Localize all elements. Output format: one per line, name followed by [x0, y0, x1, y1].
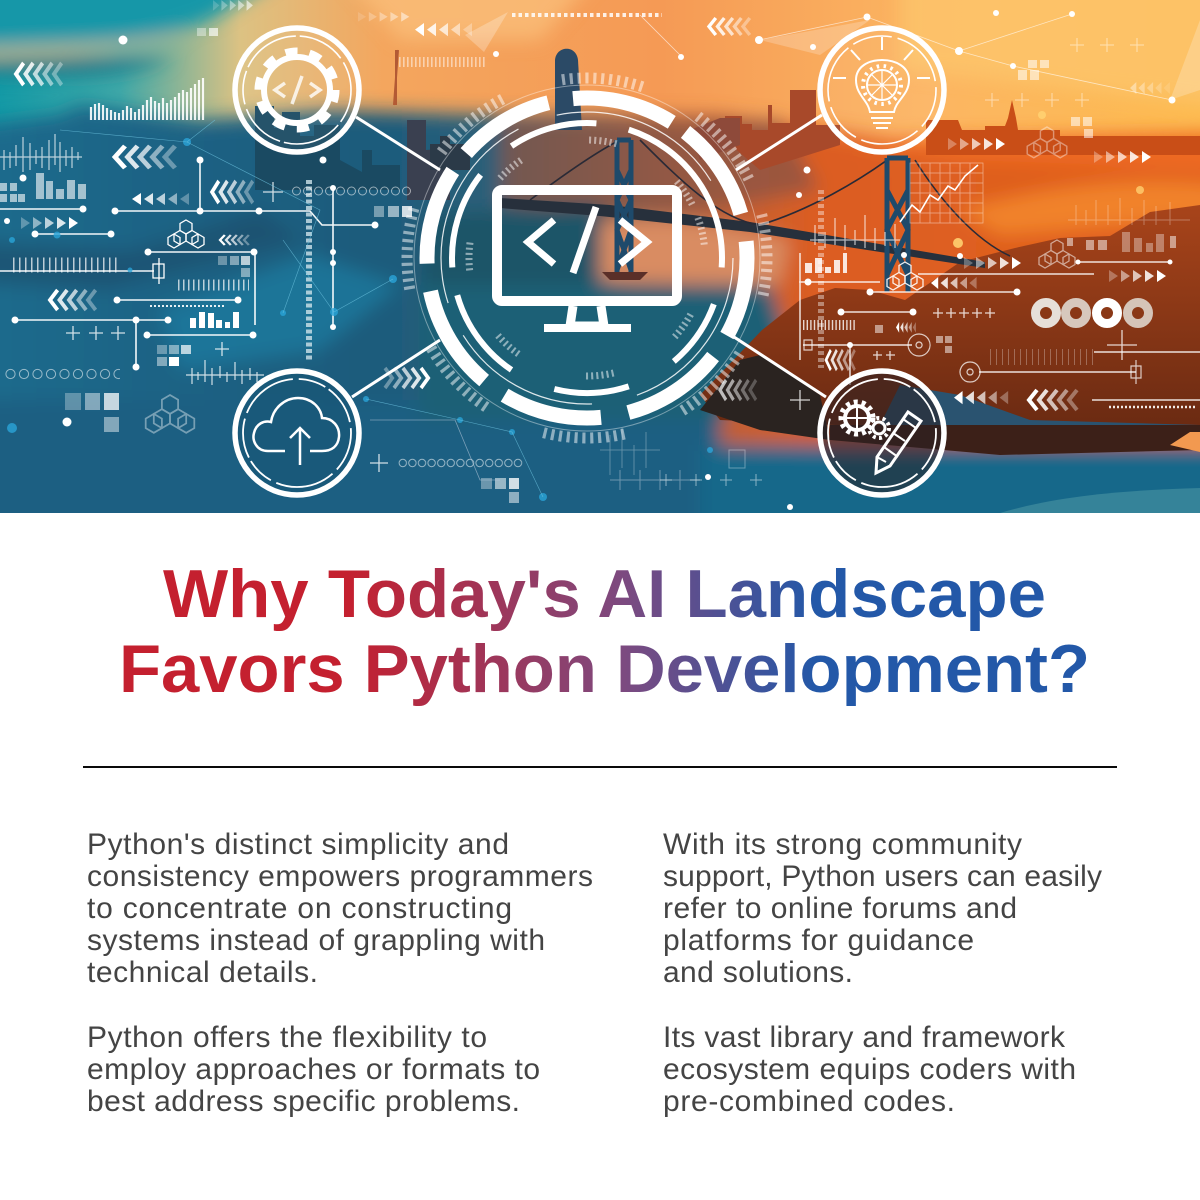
text block: flexibility — [87, 1021, 540, 1118]
text block: community: and solutions. — [663, 956, 853, 989]
circle rows — [4, 185, 523, 469]
text block: community: With its strong community — [663, 828, 1022, 861]
top sky decorations — [213, 0, 1200, 174]
grid chart with trend line — [900, 163, 983, 223]
text block: simplicity: to concentrate on constructing — [87, 892, 512, 925]
bridge — [500, 140, 1010, 292]
title: Why Today's AI Landscape — [163, 556, 1046, 632]
text block: community: support, Python users can easily — [663, 860, 1102, 893]
text block: simplicity: technical details. — [87, 956, 318, 989]
skyline silhouettes — [255, 49, 582, 200]
hill and rocks — [700, 205, 1200, 430]
text block: flexibility: Python offers the flexibility to — [87, 1021, 487, 1054]
target nodes — [804, 334, 1141, 384]
text block: simplicity: consistency empowers programmers — [87, 860, 593, 893]
arrow rows — [16, 63, 428, 388]
text block: simplicity: systems instead of grappling with — [87, 924, 545, 957]
plus signs — [66, 182, 388, 472]
connector lines — [799, 253, 1200, 400]
text block: ecosystem: Its vast library and framework — [663, 1021, 1066, 1054]
bar charts — [805, 253, 847, 273]
monitor icon — [497, 190, 677, 328]
pixel squares — [65, 28, 519, 503]
vertical dash column — [818, 190, 824, 368]
text block: flexibility: employ approaches or formats to — [87, 1053, 540, 1086]
icon circle: cloud upload — [235, 371, 359, 495]
icon circle: gear with code — [235, 28, 359, 152]
central tech ring — [352, 40, 826, 476]
text block: community: refer to online forums and — [663, 892, 1017, 925]
hexagon clusters — [887, 262, 923, 290]
text block: community — [663, 828, 1102, 989]
photo background: sky, bay, skyline, bridge — [0, 0, 1200, 570]
text block: flexibility: best address specific problems. — [87, 1085, 520, 1118]
icon circle: gears and pencil — [820, 371, 944, 495]
tick rings — [369, 40, 805, 476]
title and copy — [83, 556, 1117, 1118]
connector lines — [352, 115, 826, 397]
right data decorations — [600, 111, 1200, 510]
text block: simplicity: Python's distinct simplicity and — [87, 828, 509, 861]
outer thick segments — [411, 82, 763, 434]
arrow rows — [720, 138, 1166, 410]
title: Favors Python Development? — [119, 631, 1090, 707]
hexagon clusters — [168, 220, 204, 248]
mini bar charts — [0, 173, 239, 328]
hero illustration — [0, 0, 1200, 513]
inner segments — [396, 67, 778, 449]
connector lines with nodes — [0, 160, 375, 367]
title — [119, 556, 1090, 707]
icon circle: light bulb with gear — [820, 28, 944, 152]
text block: ecosystem — [663, 1021, 1076, 1118]
text block: community: platforms for guidance — [663, 924, 974, 957]
pixel squares — [875, 236, 1176, 353]
vertical dash column — [306, 180, 312, 360]
lower left data — [600, 428, 745, 490]
plus rows — [790, 308, 1137, 410]
bar chart: white sky bars — [91, 78, 203, 120]
text block: ecosystem: pre-combined codes. — [663, 1085, 955, 1118]
network dots — [7, 138, 713, 501]
barcodes — [803, 198, 1197, 407]
donut charts — [1036, 302, 1148, 324]
barcode waveforms — [0, 134, 264, 385]
text block: simplicity — [87, 828, 593, 989]
text block: ecosystem: ecosystem equips coders with — [663, 1053, 1076, 1086]
left data decorations — [0, 28, 713, 503]
